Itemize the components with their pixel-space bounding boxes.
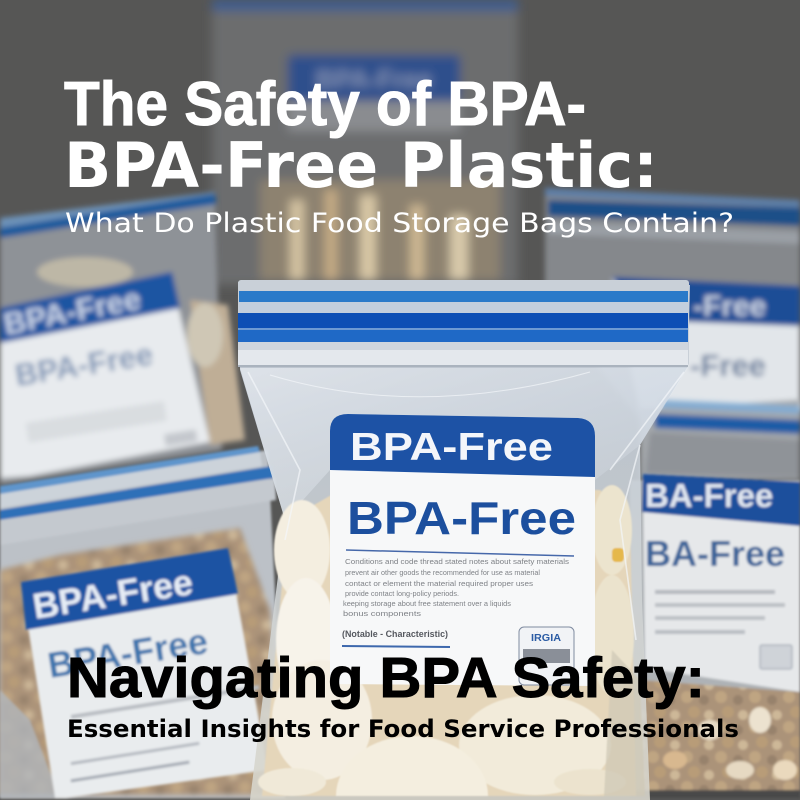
label main text: BPA-Free: [347, 492, 576, 544]
label fine print: bonus components: [343, 609, 421, 618]
bottom heading: [67, 646, 739, 743]
label fine print: Conditions and code thread stated notes about safety materials: [345, 557, 569, 566]
subtitle: What Do Plastic Food Storage Bags Contain?: [65, 208, 734, 239]
back bag: right lower, label and contents: BA-Free: [645, 533, 785, 574]
back bag: right: -Free: [693, 290, 766, 323]
back bag: left: BPA-Free: [1, 281, 144, 342]
label badge: [519, 627, 574, 685]
back bag: top centre: BPA-Free: [316, 64, 432, 94]
back bag: right lower, upper film: [640, 400, 800, 480]
back bag: bottom left label: BPA-Free: [30, 561, 196, 627]
main bag: [238, 280, 690, 800]
label fine print: provide contact long-policy periods.: [345, 589, 459, 598]
back bag: right: [545, 188, 800, 420]
film upper sheen: [240, 368, 688, 520]
label badge: IRGIA: [531, 633, 561, 644]
title line 2: BPA-Free Plastic:: [64, 129, 658, 202]
title line 1: The Safety of BPA-: [64, 70, 586, 139]
back bag: right lower, label and contents: [630, 474, 800, 798]
film highlights: [248, 372, 684, 640]
label rule: [346, 550, 574, 556]
label fine print: keeping storage about free statement over a liquids: [343, 599, 511, 608]
label subheading: (Notable - Characteristic): [342, 629, 448, 639]
back bag: top centre: [212, 0, 518, 285]
back bag: right lower, label and contents: BA-Free: [645, 477, 773, 514]
back bag: bottom left label: [0, 548, 268, 798]
zipper: [238, 280, 689, 367]
label blue rule: [342, 646, 450, 647]
subheading: Essential Insights for Food Service Professionals: [67, 715, 739, 743]
back bag: left: [0, 192, 245, 485]
title: [64, 70, 734, 239]
back bag: bottom left label: BPA-Free: [45, 620, 211, 686]
bag film body: [238, 282, 690, 800]
back bag: right: -Free: [690, 348, 766, 383]
back bag: bottom left film: [0, 446, 285, 798]
back bag: left: BPA-Free: [13, 337, 155, 393]
bottom left grains: [0, 528, 285, 795]
label fine print: prevent air other goods the recommended for use as material: [345, 568, 540, 577]
food contents: [258, 485, 645, 796]
label header text: BPA-Free: [350, 426, 553, 469]
heading: Navigating BPA Safety:: [67, 646, 705, 710]
label fine print: [343, 557, 569, 618]
front label: [330, 414, 595, 686]
label fine print: contact or element the material required proper uses: [345, 579, 533, 588]
